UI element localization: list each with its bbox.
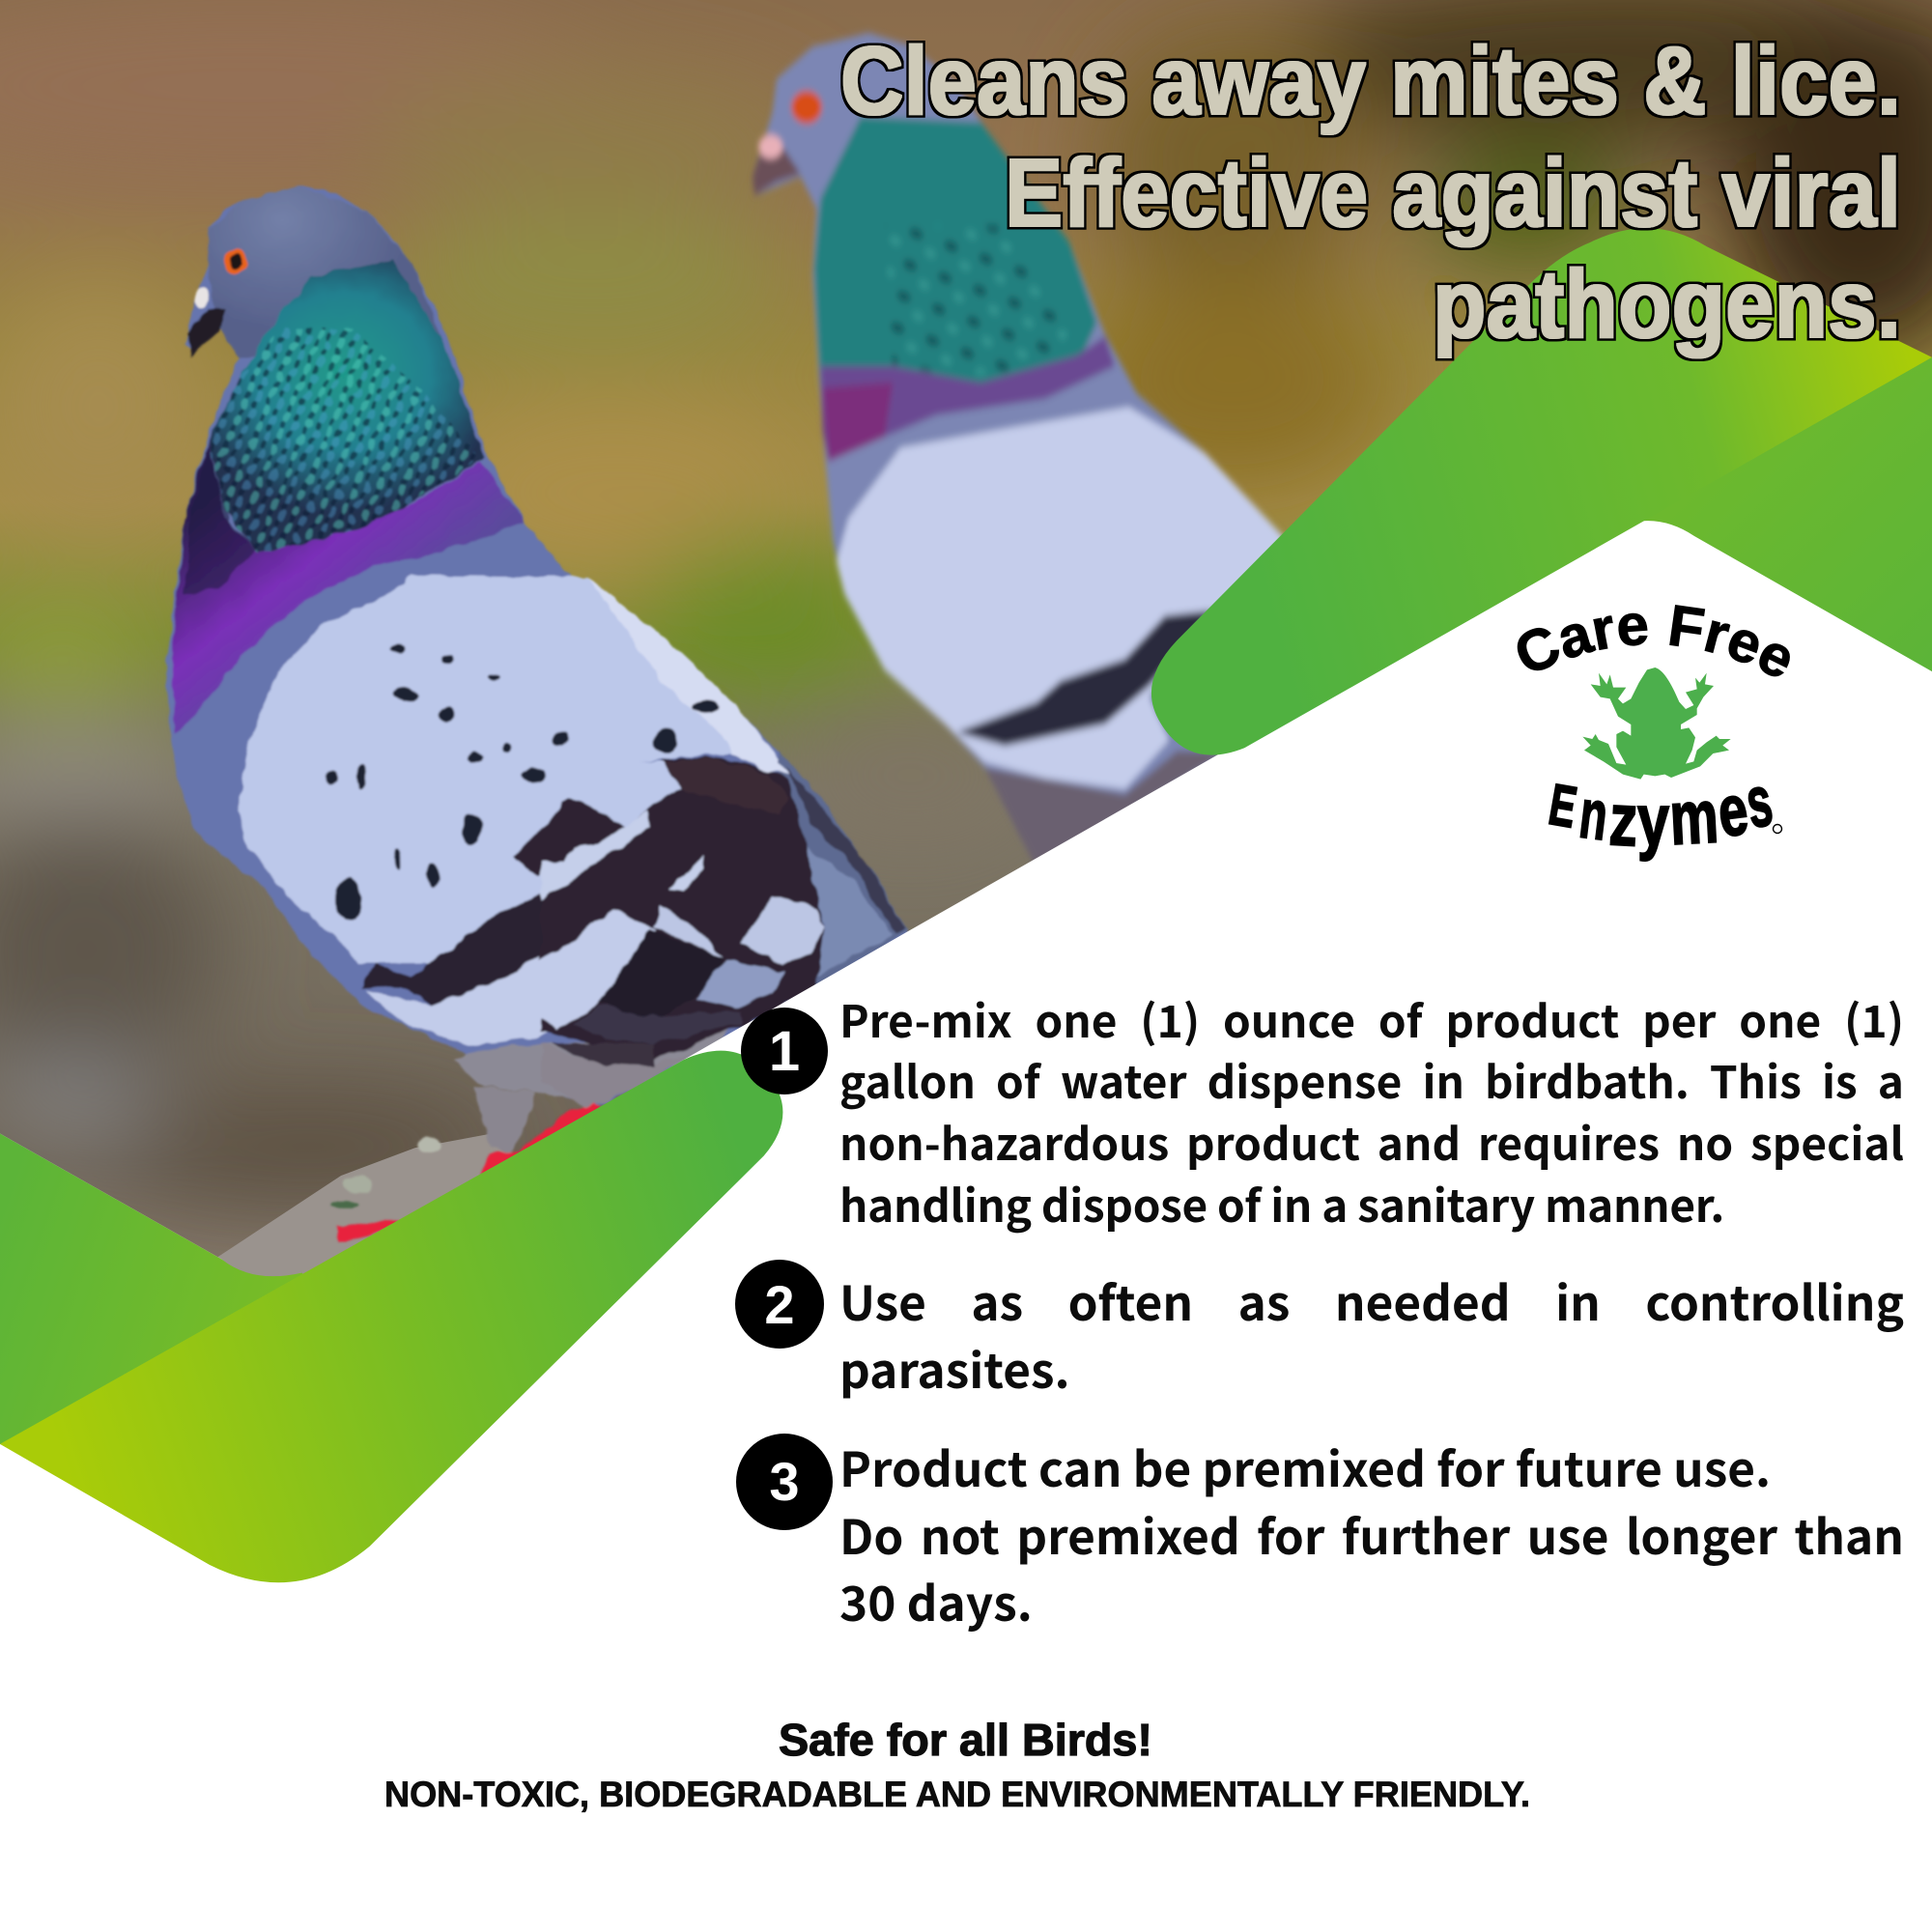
step 1 number: 1 xyxy=(769,1020,800,1083)
wordmark: Enzymes: m xyxy=(1667,773,1720,861)
wordmark: Enzymes: e xyxy=(1714,769,1752,852)
pigeon wing xyxy=(238,575,789,1241)
infographic canvas: parasites. xyxy=(839,1334,1070,1403)
green band: right triangle xyxy=(1589,357,1932,752)
non-toxic tagline: NON-TOXIC, BIODEGRADABLE AND ENVIRONMENTALLY FRIENDLY. xyxy=(384,1775,1530,1814)
green band: top swoosh xyxy=(1151,228,1932,755)
wordmark: Enzymes: z xyxy=(1607,779,1640,862)
infographic canvas: Product can be premixed for future use. xyxy=(839,1433,1771,1501)
safe for all birds heading: Safe for all Birds! xyxy=(779,1715,1152,1765)
icon: frog xyxy=(1582,668,1731,780)
infographic canvas: 30 days. xyxy=(839,1567,1033,1635)
green band: left wedge xyxy=(0,1133,332,1466)
pigeon head and neck xyxy=(172,185,525,733)
infographic canvas: Do not premixed for further use longer than xyxy=(839,1500,1904,1569)
step 3 number xyxy=(736,1434,833,1530)
pigeon tail feathers xyxy=(541,734,908,1108)
rear pigeon xyxy=(753,33,1365,869)
green band: bottom swoosh xyxy=(0,1051,782,1582)
infographic canvas: gallon of water dispense in birdbath. This is a xyxy=(839,1048,1904,1112)
wordmark: Enzymes: E xyxy=(1545,772,1581,839)
step 2 text xyxy=(839,1266,1904,1403)
infographic canvas: handling dispose of in a sanitary manner. xyxy=(839,1172,1724,1236)
front pigeon xyxy=(166,185,908,1241)
infographic canvas: Pre-mix one (1) ounce of product per one (1) xyxy=(839,987,1904,1051)
step 3 text xyxy=(839,1433,1904,1635)
step 2 number: 2 xyxy=(764,1274,795,1335)
wordmark: Enzymes: n xyxy=(1576,775,1612,855)
infographic canvas: non-hazardous product and requires no special xyxy=(839,1110,1904,1174)
logo: Care Free Enzymes: Care Free xyxy=(1517,605,1790,676)
step 3 number: 3 xyxy=(769,1451,800,1512)
title xyxy=(840,27,1901,358)
stone ledge xyxy=(208,1134,519,1295)
white content panel xyxy=(0,521,1932,1932)
wordmark: Enzymes: y xyxy=(1637,780,1669,862)
infographic canvas: Use as often as needed in controlling xyxy=(839,1266,1904,1335)
step 1 number xyxy=(741,1008,828,1094)
wordmark: Enzymes: s xyxy=(1740,760,1777,843)
step 1 text xyxy=(839,987,1904,1236)
logo: Care Free Enzymes xyxy=(1517,605,1790,862)
wordmark: Enzymes xyxy=(1545,760,1781,862)
step 2 number xyxy=(735,1260,824,1349)
